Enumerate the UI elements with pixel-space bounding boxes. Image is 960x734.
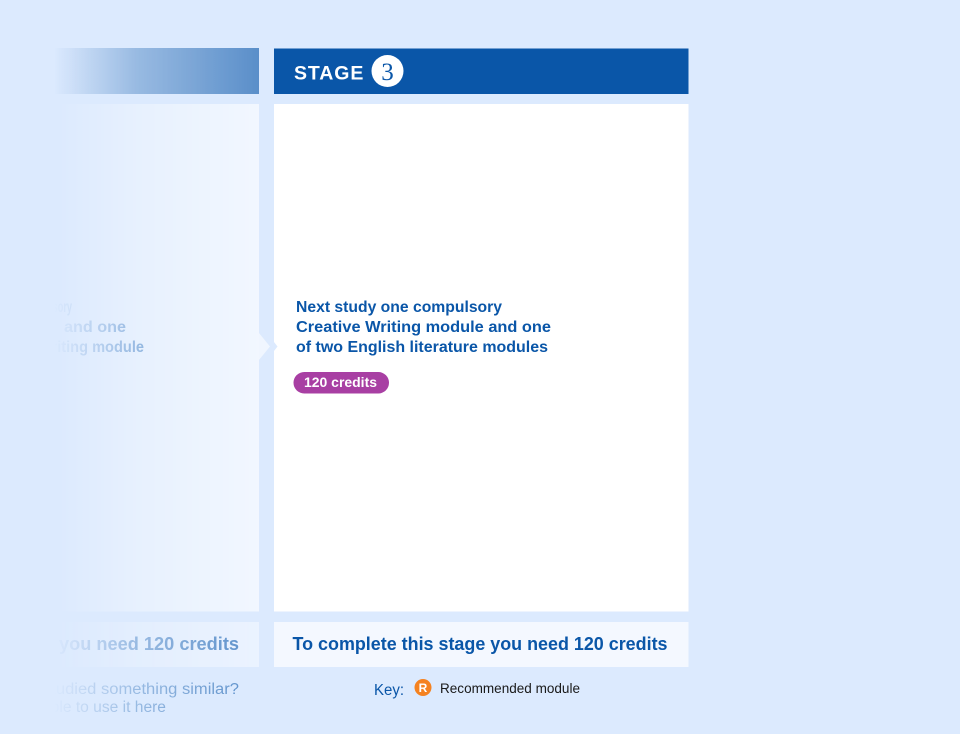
icon: recommended module badge: R xyxy=(419,681,428,695)
key description: Recommended module xyxy=(440,680,580,696)
credits pill: 120 credits xyxy=(304,374,377,390)
stage 3 header bar xyxy=(274,48,688,94)
stage 3 footer text: To complete this stage you need 120 credits xyxy=(292,633,668,654)
stage 2 module text: Writing module xyxy=(38,339,144,356)
arrow from stage 2 to stage 3 xyxy=(259,333,278,360)
stage number badge: 3 xyxy=(381,59,394,86)
stage 2 module text: and one xyxy=(64,319,126,336)
faded stage 2 column xyxy=(64,48,259,712)
stage 3 body panel xyxy=(274,104,688,612)
stage 2 header bar xyxy=(64,48,259,94)
prior study note: able to use it here xyxy=(42,699,166,716)
icon: recommended module badge xyxy=(414,679,432,696)
stage 3 footer panel xyxy=(274,622,688,667)
stage 2 footer panel xyxy=(154,622,259,667)
stage 3 heading: STAGE xyxy=(294,62,364,84)
module description: Creative Writing module and one xyxy=(296,319,551,336)
key xyxy=(374,679,580,699)
stage 2 module text: compulsory xyxy=(20,299,72,316)
key label: Key: xyxy=(374,682,404,699)
module description xyxy=(296,299,551,356)
stage 2 footer text: you need 120 credits xyxy=(59,633,239,654)
prior study note: studied something similar? xyxy=(43,681,239,698)
module description: of two English literature modules xyxy=(296,339,548,356)
stage 2 body panel xyxy=(118,104,259,612)
stage number badge xyxy=(372,55,404,87)
prior study note xyxy=(64,682,238,712)
credits pill xyxy=(294,372,389,394)
stage 2 module text xyxy=(62,304,144,356)
module description: Next study one compulsory xyxy=(296,299,502,316)
